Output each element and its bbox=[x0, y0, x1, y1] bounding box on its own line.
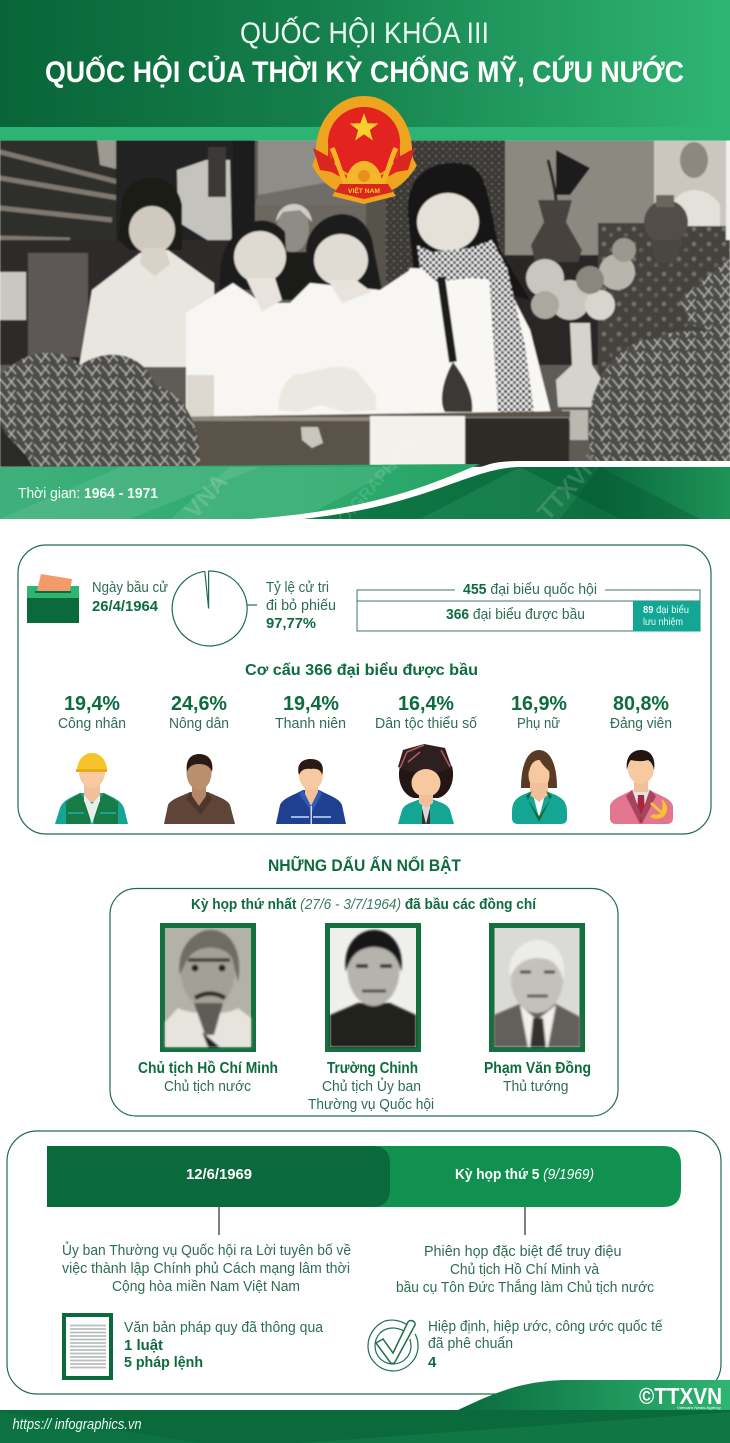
pie chart: voter turnout 97,77% bbox=[172, 571, 257, 646]
footer band bbox=[0, 1380, 730, 1443]
person 2 hair and person 3 hair bbox=[220, 220, 286, 290]
box bbox=[172, 411, 570, 467]
text: legal documents passed: 5 pháp lệnh bbox=[124, 1354, 203, 1371]
caption: Phạm Văn Đồng: Thủ tướng bbox=[503, 1078, 568, 1095]
caption: Hồ Chí Minh: Chủ tịch nước bbox=[164, 1078, 251, 1095]
text: declaration: Cộng hòa miền Nam Việt Nam bbox=[112, 1278, 300, 1295]
stat: party members: Đảng viên bbox=[610, 715, 672, 732]
connector: session to text bbox=[524, 1207, 526, 1235]
text: special session: Chủ tịch Hồ Chí Minh và bbox=[450, 1261, 600, 1278]
text: declaration: việc thành lập Chính phủ Cách mạng lâm thời bbox=[62, 1260, 350, 1277]
icon: youth bbox=[276, 759, 346, 824]
icon: farmer bbox=[164, 754, 235, 824]
icon: woman bbox=[512, 750, 567, 824]
panel: timeline bbox=[7, 1131, 721, 1394]
person 1 bbox=[79, 250, 216, 367]
stat: ethnic minorities: Dân tộc thiểu số bbox=[375, 715, 478, 732]
stat: farmers: Nông dân bbox=[169, 715, 229, 732]
panel: first session leaders bbox=[110, 888, 618, 1116]
plants bbox=[0, 353, 200, 470]
caption: Trường Chinh bbox=[308, 1060, 434, 1113]
text: legal documents passed: Văn bản pháp quy đã thông qua bbox=[124, 1319, 324, 1336]
icon: worker bbox=[55, 753, 128, 824]
icon: ballot box bbox=[27, 574, 79, 623]
stat: workers bbox=[58, 693, 126, 732]
hands bbox=[278, 367, 376, 412]
person 4 bbox=[408, 163, 530, 300]
flowers bbox=[526, 238, 636, 320]
stat: youth: 19,4% bbox=[283, 693, 339, 715]
voter turnout text: 97,77% bbox=[266, 615, 316, 632]
caption: Hồ Chí Minh: Chủ tịch Hồ Chí Minh bbox=[138, 1060, 278, 1077]
text: special session: bầu cụ Tôn Đức Thắng làm Chủ tịch nước bbox=[396, 1279, 654, 1296]
bottom left bbox=[0, 421, 34, 467]
stat: farmers bbox=[169, 693, 229, 732]
old man behind bbox=[277, 204, 309, 252]
panel: election statistics bbox=[18, 545, 711, 834]
election date bbox=[92, 579, 168, 615]
logo: TTXVN: Vietnam News Agency bbox=[677, 1405, 721, 1410]
voter turnout text: đi bỏ phiếu bbox=[266, 597, 336, 614]
text: declaration: Ủy ban Thường vụ Quốc hội ra Lời tuyên bố về bbox=[62, 1241, 351, 1259]
heading: highlights: NHỮNG DẤU ẤN NỔI BẬT bbox=[268, 855, 461, 875]
stat: workers: Công nhân bbox=[58, 715, 126, 732]
stat: farmers: 24,6% bbox=[171, 693, 227, 715]
timeline bar bbox=[47, 1146, 681, 1207]
text: legal documents passed bbox=[124, 1319, 324, 1371]
icon: ethnic minority woman bbox=[398, 744, 454, 824]
election date: 26/4/1964 bbox=[92, 598, 159, 615]
icon: national emblem: VIỆT NAM bbox=[348, 186, 380, 195]
time band with swoosh: TTXVN bbox=[532, 449, 605, 526]
stat: workers: 19,4% bbox=[64, 693, 120, 715]
portrait: Hồ Chí Minh bbox=[160, 923, 256, 1052]
icon: legal document bbox=[64, 1315, 111, 1378]
caption: Trường Chinh: Chủ tịch Ủy ban bbox=[322, 1077, 421, 1095]
caption: Phạm Văn Đồng: Phạm Văn Đồng bbox=[484, 1060, 591, 1077]
caption: Trường Chinh: Thường vụ Quốc hội bbox=[308, 1096, 434, 1113]
photo: young voters at the ballot box bbox=[0, 140, 730, 470]
text: treaties ratified bbox=[428, 1318, 663, 1371]
stat: ethnic minorities: 16,4% bbox=[398, 693, 454, 715]
election date: Ngày bầu cử bbox=[92, 579, 168, 596]
caption: Hồ Chí Minh bbox=[138, 1060, 278, 1095]
footer url: https:// infographics.vn bbox=[12, 1416, 142, 1433]
logo: TTXVN: ©TTXVN bbox=[639, 1383, 722, 1409]
icon: party member bbox=[610, 750, 673, 824]
bar: delegates breakdown bbox=[357, 581, 700, 632]
caption: Trường Chinh: Trường Chinh bbox=[327, 1060, 418, 1077]
portrait: Phạm Văn Đồng bbox=[489, 923, 585, 1052]
portrait: Trường Chinh bbox=[325, 923, 421, 1052]
voter turnout text bbox=[266, 579, 336, 632]
time band with swoosh: VNA bbox=[179, 468, 233, 524]
time band with swoosh bbox=[0, 435, 730, 528]
white clothes bbox=[186, 270, 552, 417]
bar: delegates breakdown: 366 đại biểu được bầu bbox=[446, 606, 585, 623]
top header band bbox=[0, 0, 730, 140]
text: treaties ratified: 4 bbox=[428, 1354, 437, 1371]
stat: women: Phụ nữ bbox=[517, 715, 560, 732]
stat: youth bbox=[275, 693, 346, 732]
first session subtitle: Kỳ họp thứ nhất (27/6 - 3/7/1964) đã bầu các đồng chí bbox=[191, 896, 537, 913]
text: declaration bbox=[62, 1241, 351, 1295]
text: legal documents passed: 1 luật bbox=[124, 1337, 163, 1354]
heading: delegates structure: Cơ cấu 366 đại biểu được bầu bbox=[245, 661, 478, 679]
caption: Phạm Văn Đồng bbox=[484, 1060, 591, 1095]
text: treaties ratified: Hiệp định, hiệp ước, công ước quốc tế bbox=[428, 1318, 663, 1335]
icon: national emblem bbox=[312, 96, 417, 204]
icon: check seal bbox=[368, 1320, 418, 1371]
text: special session: Phiên họp đặc biệt để truy điệu bbox=[424, 1243, 622, 1260]
stat: women bbox=[511, 693, 567, 732]
time band with swoosh: O.GRAPHICS bbox=[334, 435, 420, 528]
timeline bar: 12/6/1969 bbox=[186, 1166, 252, 1183]
stat: party members: 80,8% bbox=[613, 693, 669, 715]
timeline bar: Kỳ họp thứ 5 (9/1969) bbox=[455, 1166, 594, 1183]
stat: youth: Thanh niên bbox=[275, 715, 346, 732]
bar: delegates breakdown: 89 đại biểu bbox=[643, 604, 689, 616]
bar: delegates breakdown: 455 đại biểu quốc hội bbox=[463, 581, 597, 598]
bar: delegates breakdown: lưu nhiệm bbox=[643, 616, 683, 628]
stat: ethnic minorities bbox=[375, 693, 478, 732]
text: special session bbox=[396, 1243, 654, 1296]
time text: Thời gian: 1964 - 1971 bbox=[18, 485, 158, 502]
stat: party members bbox=[610, 693, 672, 732]
connector: date to text bbox=[218, 1207, 220, 1235]
text: treaties ratified: đã phê chuẩn bbox=[428, 1335, 513, 1352]
voter turnout text: Tỷ lệ cử tri bbox=[266, 579, 329, 596]
title: session name: QUỐC HỘI KHÓA III bbox=[240, 16, 489, 50]
stat: women: 16,9% bbox=[511, 693, 567, 715]
